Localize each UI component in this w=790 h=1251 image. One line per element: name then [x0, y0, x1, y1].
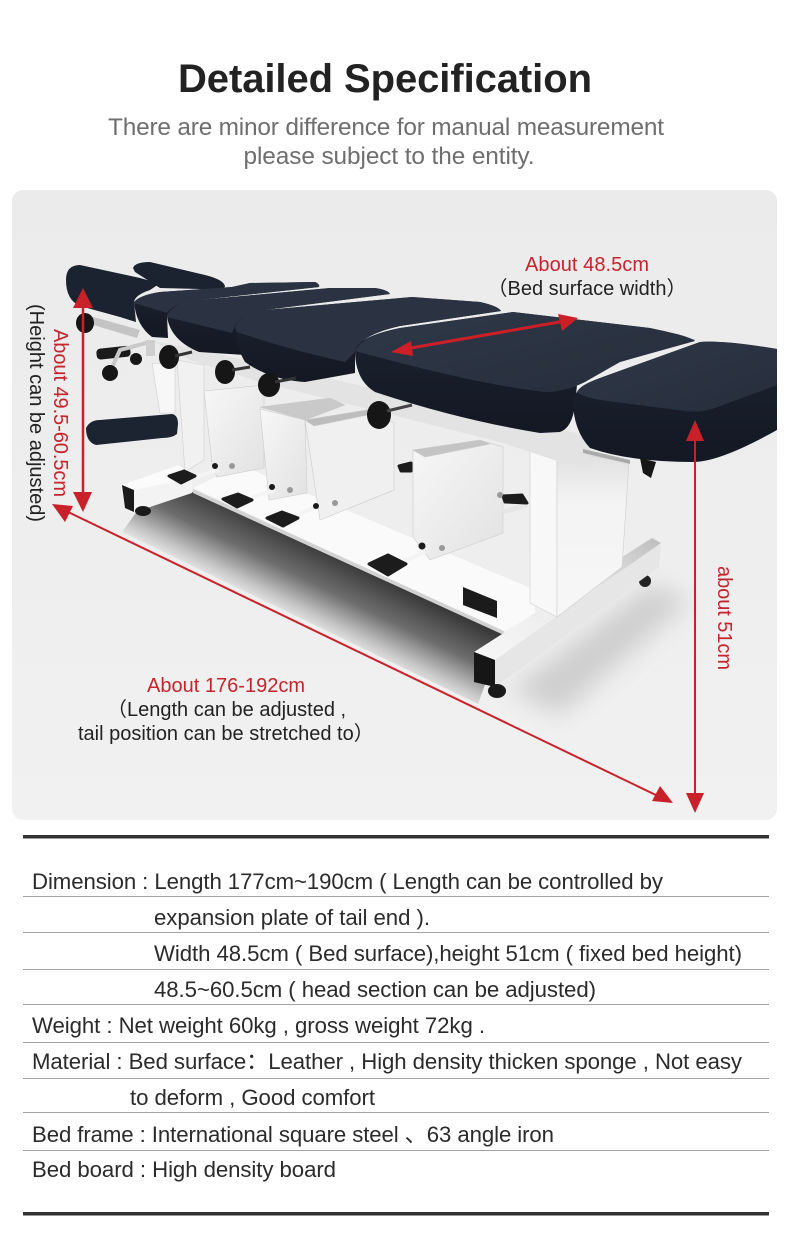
spec rows: Dimension : Length 177cm~190cm ( Length can be controlled by	[32, 869, 664, 894]
pad 1	[134, 282, 319, 338]
pad 5	[573, 342, 777, 462]
arrow: fixed bed height	[686, 420, 704, 813]
label: height	[25, 304, 71, 522]
subtitle: please subject to the entity.	[244, 143, 534, 170]
label: length	[78, 675, 374, 745]
specification table	[23, 835, 769, 1216]
adjustment knobs	[76, 313, 656, 478]
label: width: About 48.5cm	[525, 254, 649, 276]
pad 2	[167, 288, 390, 355]
spec rows: Width 48.5cm ( Bed surface),height 51cm ( fixed bed height)	[154, 941, 742, 966]
floor shadow	[122, 492, 690, 715]
arrow: length	[52, 504, 673, 803]
bed columns	[152, 360, 629, 617]
bed frame base	[122, 465, 661, 698]
spec rows: Weight : Net weight 60kg , gross weight 72kg .	[32, 1013, 485, 1038]
white pedal boxes	[204, 385, 503, 560]
hand crank	[96, 340, 155, 381]
panel: product photo	[12, 190, 777, 820]
label: length: About 176-192cm	[147, 675, 305, 697]
spec rows: Bed board : High density board	[32, 1157, 336, 1182]
bed surface pads	[134, 282, 777, 462]
title: Detailed Specification	[178, 57, 592, 101]
spec rows: 48.5~60.5cm ( head section can be adjusted)	[154, 977, 596, 1002]
pedals	[169, 463, 527, 575]
label: width: （Bed surface width）	[488, 277, 686, 300]
label: fixed height: about 51cm	[713, 566, 735, 670]
pad 4	[355, 312, 695, 433]
head rolls	[66, 262, 225, 322]
label: height: About 49.5-60.5cm	[49, 329, 71, 497]
arrow: height	[73, 288, 93, 512]
arrow: bed surface width	[391, 314, 578, 356]
upper support beam	[150, 340, 590, 466]
label: height: (Height can be adjusted)	[25, 304, 47, 522]
arm rest	[86, 414, 178, 445]
subtitle: There are minor difference for manual measurement	[108, 114, 664, 141]
label: width	[488, 254, 686, 300]
spec rows: Bed frame : International square steel 、63 angle iron	[32, 1122, 554, 1147]
spec rows	[32, 869, 743, 1182]
spec rows: to deform , Good comfort	[130, 1085, 375, 1110]
nameplate label	[463, 587, 497, 618]
label: length: tail position can be stretched to）	[78, 722, 374, 745]
label: length: （Length can be adjusted ,	[107, 698, 346, 721]
subtitle	[108, 114, 664, 170]
spec rows: expansion plate of tail end ).	[154, 905, 430, 930]
spec rows: Material : Bed surface：Leather , High density thicken sponge , Not easy	[32, 1049, 743, 1074]
pad 3	[235, 297, 501, 382]
